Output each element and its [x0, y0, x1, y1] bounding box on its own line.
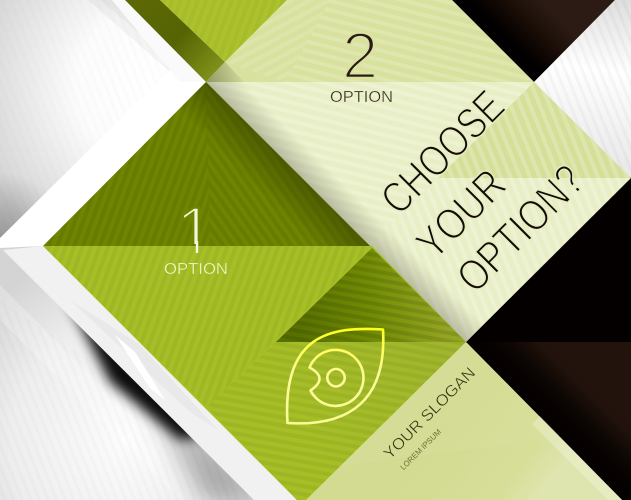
panel: top lime triangle — [160, 0, 287, 62]
text: your slogan: YOUR SLOGAN — [381, 365, 479, 463]
panel: slogan section — [306, 342, 622, 500]
panel: white and grey background — [0, 0, 300, 500]
panel: dark top triangle — [452, 0, 615, 82]
panel: white frame bands — [0, 0, 297, 500]
heading: choose your option: YOUR — [407, 160, 516, 269]
heading: choose your option — [371, 81, 594, 302]
label: option 2: OPTION — [330, 89, 393, 106]
panel: dark brown lower right — [466, 342, 631, 500]
panel: option 2 pale diamond — [206, 0, 631, 342]
shadow: below the lower-left white band — [65, 295, 270, 500]
heading: choose your option: OPTION? — [447, 156, 594, 302]
panel: top olive strip — [125, 0, 225, 82]
panel: option 1 diamond — [43, 82, 466, 500]
number 2: 2 — [342, 19, 378, 92]
icon: eye — [287, 329, 383, 423]
panel: black right area — [465, 177, 631, 343]
text: lorem ipsum: LOREM IPSUM — [399, 427, 443, 472]
number 1 — [184, 206, 200, 253]
label: option 1: OPTION — [164, 261, 228, 278]
panel: eye icon section — [207, 248, 466, 500]
panel: white right triangle — [534, 0, 631, 180]
heading: choose your option: CHOOSE — [371, 81, 514, 224]
number 1: 1 — [176, 193, 213, 267]
